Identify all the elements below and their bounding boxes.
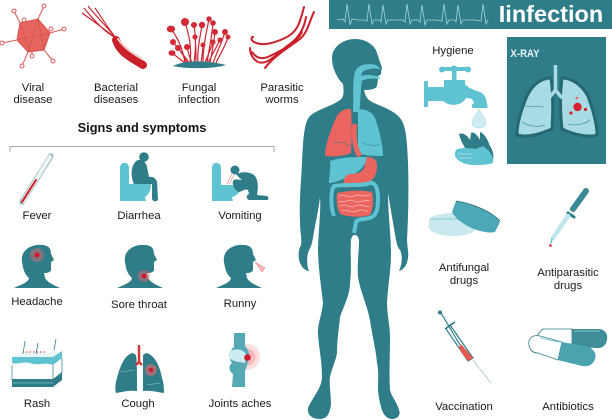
header banner xyxy=(329,0,612,29)
infection spots xyxy=(569,97,587,115)
label: bacterial diseases: diseases xyxy=(94,94,139,106)
icon: runny nose xyxy=(216,245,265,288)
label: cough: Cough xyxy=(121,398,155,410)
icon: vomiting xyxy=(212,163,268,201)
label: antibiotics: Antibiotics xyxy=(542,401,594,413)
icon: fungus xyxy=(167,16,230,68)
label: bacterial diseases: Bacterial xyxy=(94,82,138,94)
icon: bacteria xyxy=(82,6,143,65)
x-ray lungs xyxy=(517,65,597,136)
colon xyxy=(331,183,378,233)
icon: diarrhea toilet xyxy=(120,152,158,201)
label: antifungal drugs: Antifungal xyxy=(439,262,489,274)
small intestine xyxy=(337,191,373,217)
label: parasitic worms: worms xyxy=(264,94,299,106)
icon: syringe xyxy=(438,310,491,383)
title: Iinfection xyxy=(499,1,603,27)
icon: hands xyxy=(455,132,493,165)
stomach xyxy=(344,157,377,187)
label: fungal infection: infection xyxy=(178,94,220,106)
x-ray label: X-RAY xyxy=(510,47,540,60)
label: runny: Runny xyxy=(224,298,257,310)
liver xyxy=(329,157,367,183)
icon: headache xyxy=(14,245,60,288)
icon: skin rash xyxy=(12,339,62,387)
label: antiparasitic drugs: drugs xyxy=(554,280,582,292)
ecg line xyxy=(337,4,488,25)
heading: signs and symptoms: Signs and symptoms xyxy=(78,120,206,135)
label: joints aches: Joints aches xyxy=(209,398,272,410)
label: sore throat: Sore throat xyxy=(111,299,168,311)
label: headache: Headache xyxy=(11,296,63,308)
label: rash: Rash xyxy=(24,398,50,410)
label: antiparasitic drugs: Antiparasitic xyxy=(537,267,599,279)
label: fever: Fever xyxy=(23,210,52,222)
human body xyxy=(299,39,408,419)
icon: sore throat xyxy=(117,245,163,288)
red lung xyxy=(325,109,352,156)
label: vomiting: Vomiting xyxy=(218,210,262,222)
icon: faucet xyxy=(424,66,488,108)
icon: antibiotics capsules xyxy=(529,329,607,366)
icon: water drop xyxy=(472,109,486,128)
icon: antifungal tablets xyxy=(429,201,500,236)
icon: thermometer xyxy=(22,156,51,202)
light lung xyxy=(358,109,383,156)
panel: x-ray xyxy=(507,37,606,164)
label: diarrhea: Diarrhea xyxy=(117,210,161,222)
label: viral disease: Viral xyxy=(22,82,44,94)
label: fungal infection: Fungal xyxy=(182,82,216,94)
label: viral disease: disease xyxy=(14,94,52,106)
esophagus xyxy=(354,124,360,156)
label: hygiene: Hygiene xyxy=(432,45,474,57)
label: parasitic worms: Parasitic xyxy=(260,82,304,94)
bracket xyxy=(10,146,274,152)
icon: dropper xyxy=(549,191,586,247)
icon: lungs with red spot xyxy=(115,345,164,393)
body silhouette xyxy=(299,39,408,419)
icon: knee joint xyxy=(229,333,260,387)
label: vaccination: Vaccination xyxy=(435,401,493,413)
icon: virus xyxy=(0,4,66,68)
airway xyxy=(353,64,381,112)
label: antifungal drugs: drugs xyxy=(450,275,478,287)
icon: parasitic worms xyxy=(250,7,314,68)
